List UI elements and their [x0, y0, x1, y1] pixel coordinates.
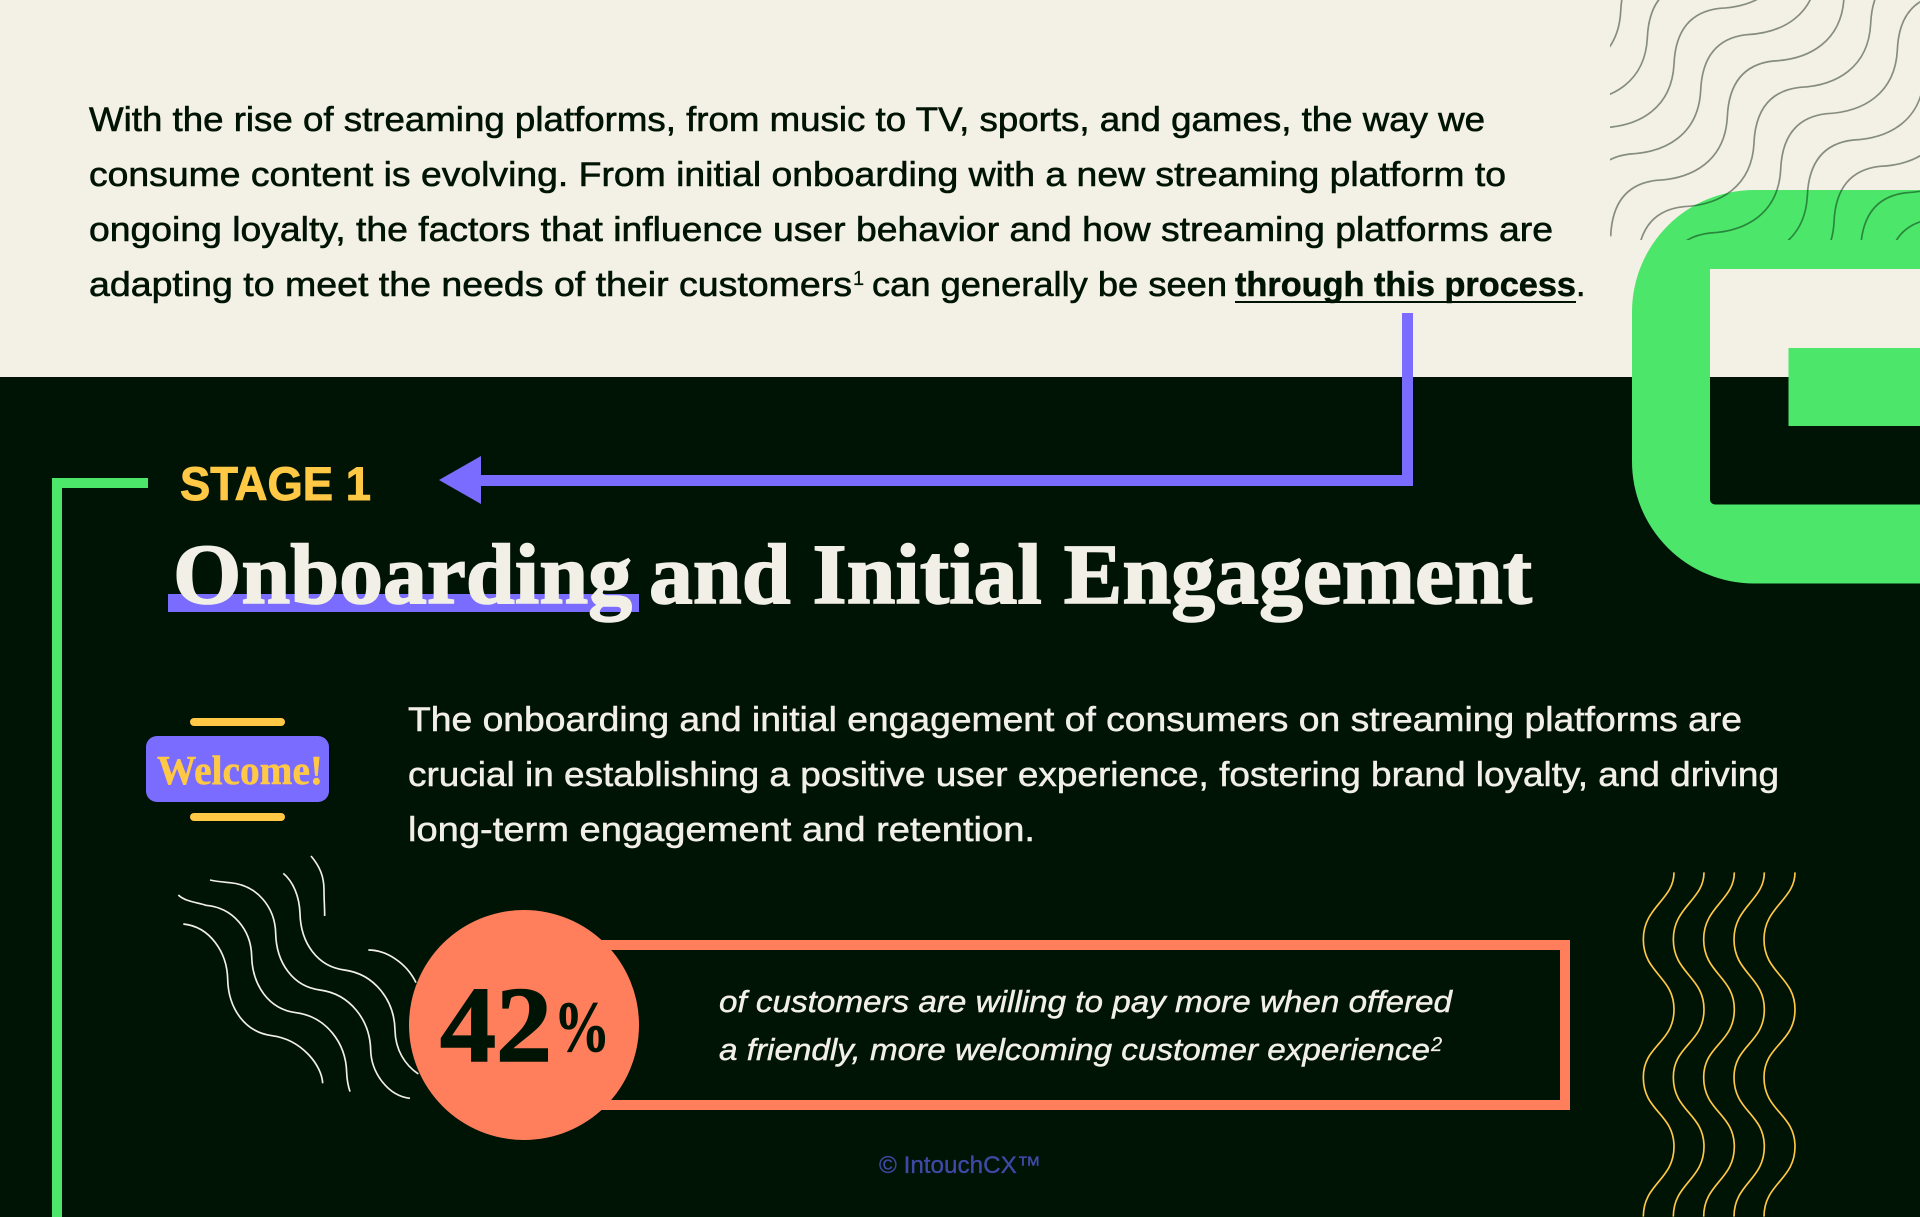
yellow wavy lines	[1643, 872, 1795, 1217]
top intro band	[0, 0, 1920, 377]
dark background	[0, 377, 1920, 1217]
callout box	[524, 940, 1570, 1110]
footer credit: © IntouchCX™	[879, 1152, 1041, 1179]
body paragraph: crucial in establishing a positive user experience, fostering brand loyalty, and driving	[408, 756, 1779, 794]
intro paragraph: 1	[853, 268, 864, 290]
stage label: STAGE 1	[180, 457, 371, 510]
callout text: a friendly, more welcoming customer experience	[719, 1032, 1430, 1067]
body paragraph: The onboarding and initial engagement of consumers on streaming platforms are	[408, 701, 1742, 739]
intro paragraph: ongoing loyalty, the factors that influence user behavior and how streaming platforms are	[89, 211, 1553, 249]
stat circle: 42	[440, 966, 552, 1085]
link underline	[1235, 301, 1576, 303]
intro paragraph: through this process	[1235, 266, 1576, 304]
heading: and Initial Engagement	[649, 526, 1532, 622]
green corner bracket	[52, 478, 148, 1217]
intro paragraph: .	[1576, 266, 1585, 304]
heading underline highlight	[168, 594, 639, 612]
purple arrow	[439, 313, 1413, 504]
intro paragraph: consume content is evolving. From initial onboarding with a new streaming platform to	[89, 156, 1506, 194]
heading	[173, 526, 1532, 622]
callout text: of customers are willing to pay more when offered	[719, 984, 1454, 1019]
intro paragraph: can generally be seen	[872, 266, 1227, 304]
intro paragraph: With the rise of streaming platforms, from music to TV, sports, and games, the way we	[89, 101, 1485, 139]
green G logo shape	[1632, 190, 1920, 584]
heading: Onboarding	[173, 526, 632, 622]
icon: welcome badge: Welcome!	[157, 747, 323, 793]
grey wavy lines	[1610, 0, 1920, 240]
intro paragraph: adapting to meet the needs of their customers	[89, 266, 852, 304]
stat circle	[409, 910, 639, 1140]
body paragraph: long-term engagement and retention.	[408, 811, 1035, 849]
icon: welcome badge	[146, 718, 329, 821]
callout text	[719, 984, 1454, 1067]
intro paragraph	[89, 101, 1585, 304]
callout text: 2	[1430, 1034, 1442, 1056]
body paragraph	[408, 701, 1779, 849]
white wavy lines	[178, 856, 418, 1098]
stat circle: %	[554, 987, 610, 1067]
